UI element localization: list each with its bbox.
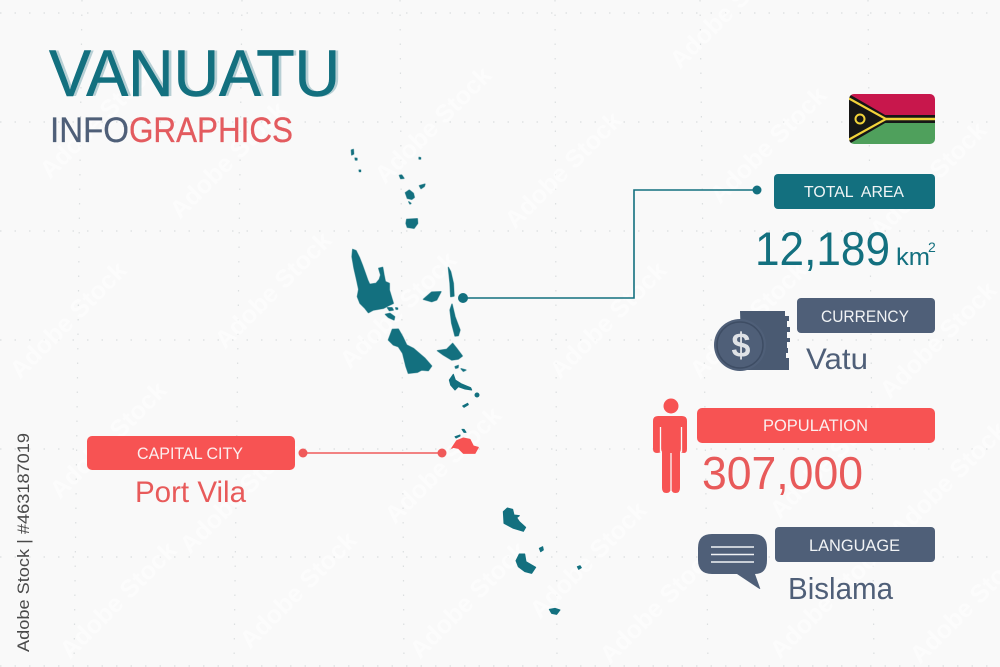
text: Adobe Stock	[874, 276, 1000, 404]
text: Adobe Stock	[764, 396, 892, 524]
subtitle: GRAPHICS	[129, 111, 293, 150]
capital city value: Port Vila	[135, 476, 246, 509]
text: Adobe Stock	[234, 526, 362, 654]
map of Vanuatu	[351, 149, 581, 614]
icon: coins: $	[732, 327, 751, 365]
text: Adobe Stock	[499, 106, 627, 234]
title: VANUATU	[52, 36, 343, 110]
population label	[697, 408, 935, 443]
subtitle	[50, 111, 293, 150]
connector: capital city	[298, 448, 446, 458]
text: Adobe Stock	[704, 81, 832, 209]
text: Adobe Stock	[864, 116, 992, 244]
language label	[775, 527, 935, 562]
capital city label	[87, 436, 295, 470]
currency value: Vatu	[806, 343, 868, 376]
text: Adobe Stock	[4, 256, 132, 384]
total area value: 12,189	[755, 222, 890, 275]
map highlight: Efate	[452, 438, 478, 453]
text: Adobe Stock	[34, 56, 162, 184]
population value: 307,000	[702, 447, 863, 499]
text: Adobe Stock	[334, 246, 462, 374]
text: Adobe Stock	[174, 431, 302, 559]
text: Adobe Stock	[524, 496, 652, 624]
text: Adobe Stock	[209, 226, 337, 354]
stock credit: Adobe Stock | #463187019	[14, 433, 33, 652]
currency label: CURRENCY	[821, 308, 909, 326]
icon: speech bubble	[698, 534, 767, 589]
text: Adobe Stock	[44, 376, 172, 504]
population label: POPULATION	[763, 417, 868, 435]
icon: person	[653, 398, 687, 493]
text: Adobe Stock	[54, 536, 182, 664]
total area value: km	[896, 244, 930, 271]
text: Adobe Stock	[684, 256, 812, 384]
icon: coins	[714, 311, 790, 371]
total area value: 2	[928, 239, 936, 255]
currency label	[797, 298, 935, 333]
text: Adobe Stock	[164, 96, 292, 224]
text: Adobe Stock	[379, 401, 507, 529]
text: Adobe Stock	[369, 61, 497, 189]
connector: total area	[458, 186, 762, 303]
total area label: TOTAL AREA	[804, 184, 904, 201]
subtitle: INFO	[50, 111, 129, 150]
text: Adobe Stock	[544, 256, 672, 384]
text: Adobe Stock	[764, 536, 892, 664]
flag of Vanuatu	[849, 94, 935, 144]
total area label	[774, 174, 935, 209]
language value: Bislama	[788, 571, 894, 606]
language label: LANGUAGE	[809, 537, 900, 555]
text: Adobe Stock	[404, 536, 532, 664]
title: VANUATU	[49, 36, 340, 110]
text: Adobe Stock	[594, 541, 722, 667]
capital city label: CAPITAL CITY	[137, 445, 243, 463]
